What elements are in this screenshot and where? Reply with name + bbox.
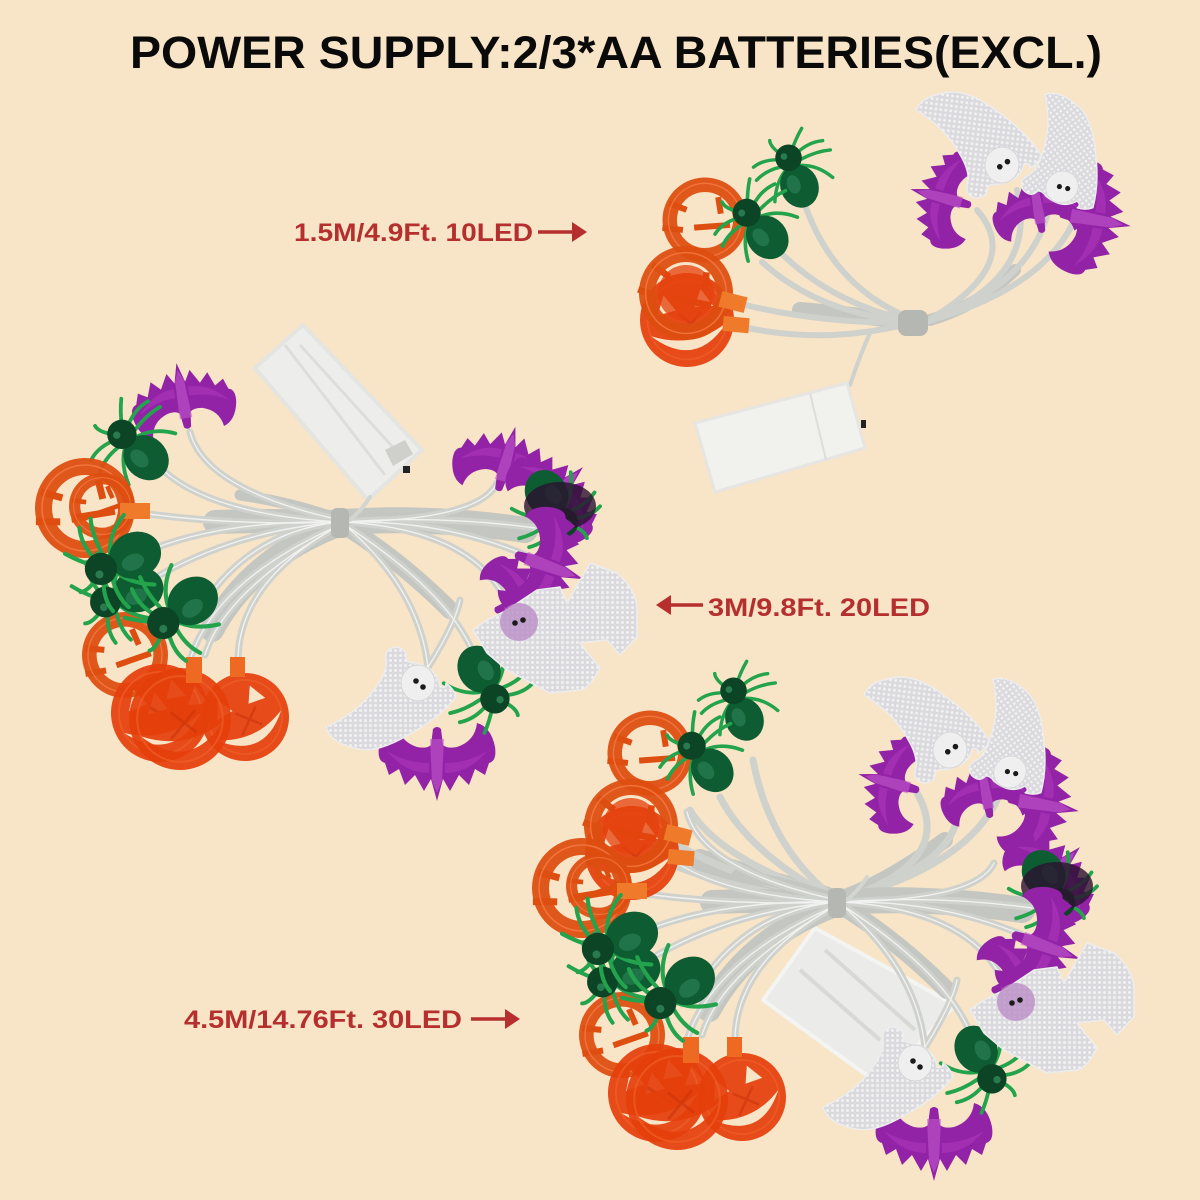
- label: 3M 20LED with arrow: 3M/9.8Ft. 20LED: [708, 594, 930, 622]
- bat and spider, top left: [75, 354, 240, 505]
- bats, spider and ghosts, right: [326, 430, 637, 801]
- pumpkins and spiders: [622, 122, 846, 374]
- string lights: 20 LED: [27, 325, 637, 801]
- wires: [745, 190, 1073, 385]
- upper bats and ghosts: [846, 667, 1089, 867]
- label: 4.5M 30LED with arrow: 4.5M/14.76Ft. 30LED: [184, 1006, 462, 1034]
- string lights: 10 LED: [622, 82, 1141, 492]
- top right bat: [446, 413, 566, 508]
- battery box: [255, 325, 422, 500]
- pumpkins and spiders: [27, 450, 303, 778]
- bats and ghosts: [898, 82, 1141, 282]
- battery box: [695, 383, 866, 492]
- lower pumpkins and spiders: [524, 830, 800, 1158]
- wires: [148, 432, 537, 672]
- label: 3M 20LED with arrow: [656, 594, 930, 622]
- title: POWER SUPPLY:2/3*AA BATTERIES(EXCL.): [130, 27, 1102, 78]
- wires: [645, 760, 1034, 1052]
- string lights: 30 LED: [524, 655, 1134, 1181]
- upper pumpkins and spiders: [567, 655, 791, 907]
- lower bats, spider and ghosts: [823, 810, 1134, 1181]
- label: 1.5M 10LED with arrow: 1.5M/4.9Ft. 10LED: [294, 219, 533, 247]
- battery box: [763, 928, 955, 1085]
